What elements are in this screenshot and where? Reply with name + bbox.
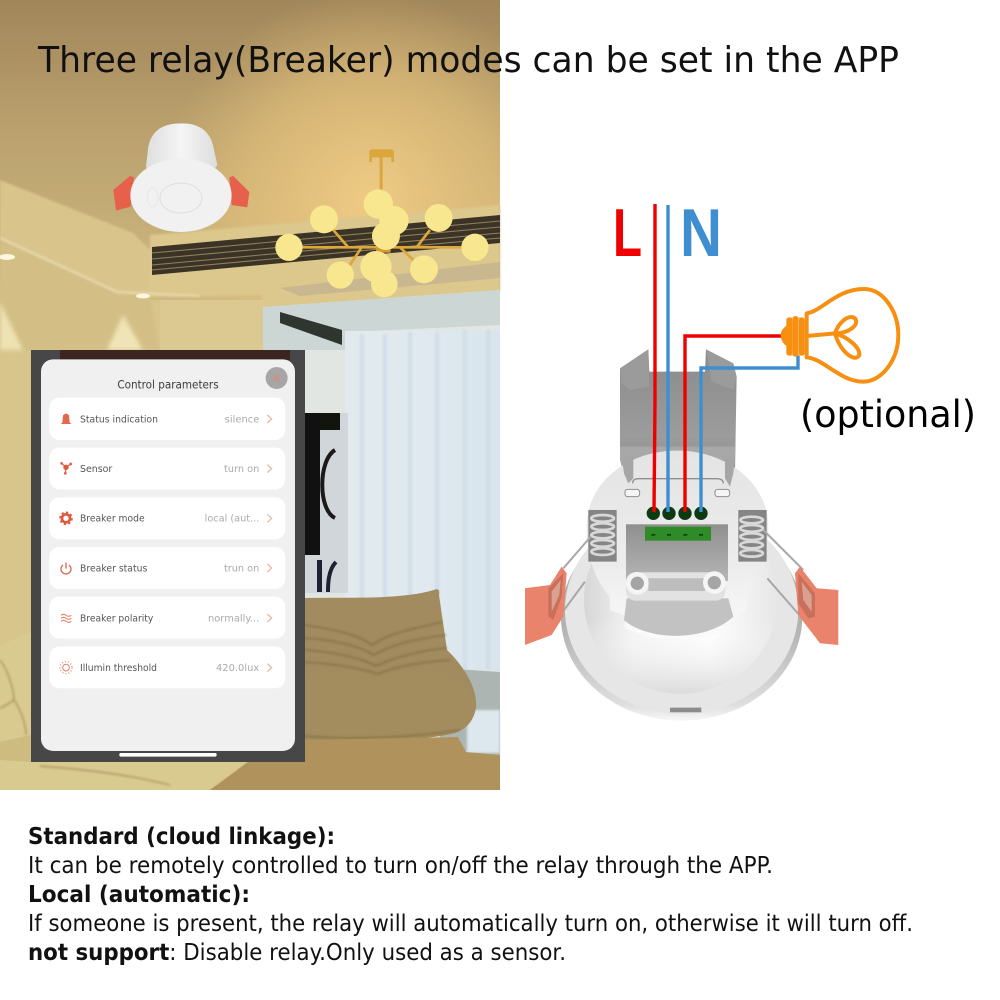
row: breaker status: [49, 547, 285, 589]
panel: app screen: [31, 350, 305, 762]
row: illumin threshold: Illumin threshold: [80, 663, 157, 674]
flap hinges: [622, 455, 735, 497]
flange: [561, 513, 802, 721]
cavity: [624, 524, 733, 636]
mounting bar with screw holes: [626, 571, 726, 601]
air vent: [152, 215, 500, 275]
spring arms: [562, 530, 803, 615]
not support line: not support: Disable relay.Only used as a sensor.: [28, 940, 566, 966]
top disc: [587, 451, 768, 639]
row: status indication: Status indication: [80, 414, 158, 425]
row: breaker status: trun on: [224, 563, 259, 574]
row: sensor: turn on: [224, 464, 259, 475]
terminal block: [645, 507, 711, 541]
clip: right: [795, 567, 838, 645]
standard heading: Standard (cloud linkage):: [28, 824, 335, 850]
row: breaker polarity: normally...: [208, 613, 259, 624]
home indicator: [119, 753, 217, 757]
row: illumin threshold: 420.0lux: [216, 663, 259, 674]
sensor back view: [525, 349, 838, 721]
label: L: L: [613, 195, 642, 271]
label: optional: (optional): [800, 393, 976, 436]
wall spotlights: [0, 254, 150, 350]
row: illumin threshold: [49, 647, 285, 688]
row: breaker mode: local (aut...: [205, 514, 259, 525]
label: N: N: [680, 195, 722, 271]
screen title: Control parameters: [117, 378, 219, 392]
wires: [654, 204, 798, 512]
wiring diagram: [525, 195, 976, 721]
row: breaker polarity: [49, 597, 285, 639]
springs: [588, 510, 767, 562]
row: breaker mode: [49, 497, 285, 539]
explanation text: [28, 824, 913, 966]
floor by the window: [440, 668, 500, 760]
wood floor: [210, 737, 500, 790]
ceiling recess and curtains: [263, 290, 500, 790]
sensor installed on ceiling: [113, 123, 249, 232]
dome: [584, 506, 777, 694]
sofa: [304, 589, 476, 741]
washing machine: [304, 413, 348, 593]
row: breaker status: Breaker status: [80, 563, 147, 574]
local heading: Local (automatic):: [28, 882, 250, 908]
chandelier: [275, 149, 489, 297]
local description: If someone is present, the relay will automatically turn on, otherwise it will turn off.: [28, 911, 913, 937]
panel: living room photo: [0, 0, 500, 790]
row: sensor: Sensor: [80, 464, 113, 475]
left bulkhead: [0, 180, 500, 350]
title: Three relay(Breaker) modes can be set in the APP: [37, 40, 899, 81]
row: breaker polarity: Breaker polarity: [80, 613, 153, 624]
row: breaker mode: Breaker mode: [80, 514, 145, 525]
standard description: It can be remotely controlled to turn on/off the relay through the APP.: [28, 853, 773, 879]
bulb: [781, 289, 898, 382]
clip: left: [525, 567, 567, 645]
row: sensor: [49, 448, 285, 489]
row: status indication: silence: [225, 414, 259, 425]
mounting flap: [620, 349, 737, 473]
close button: [266, 367, 288, 389]
armchair: [0, 632, 245, 790]
row: status indication: [49, 398, 285, 440]
